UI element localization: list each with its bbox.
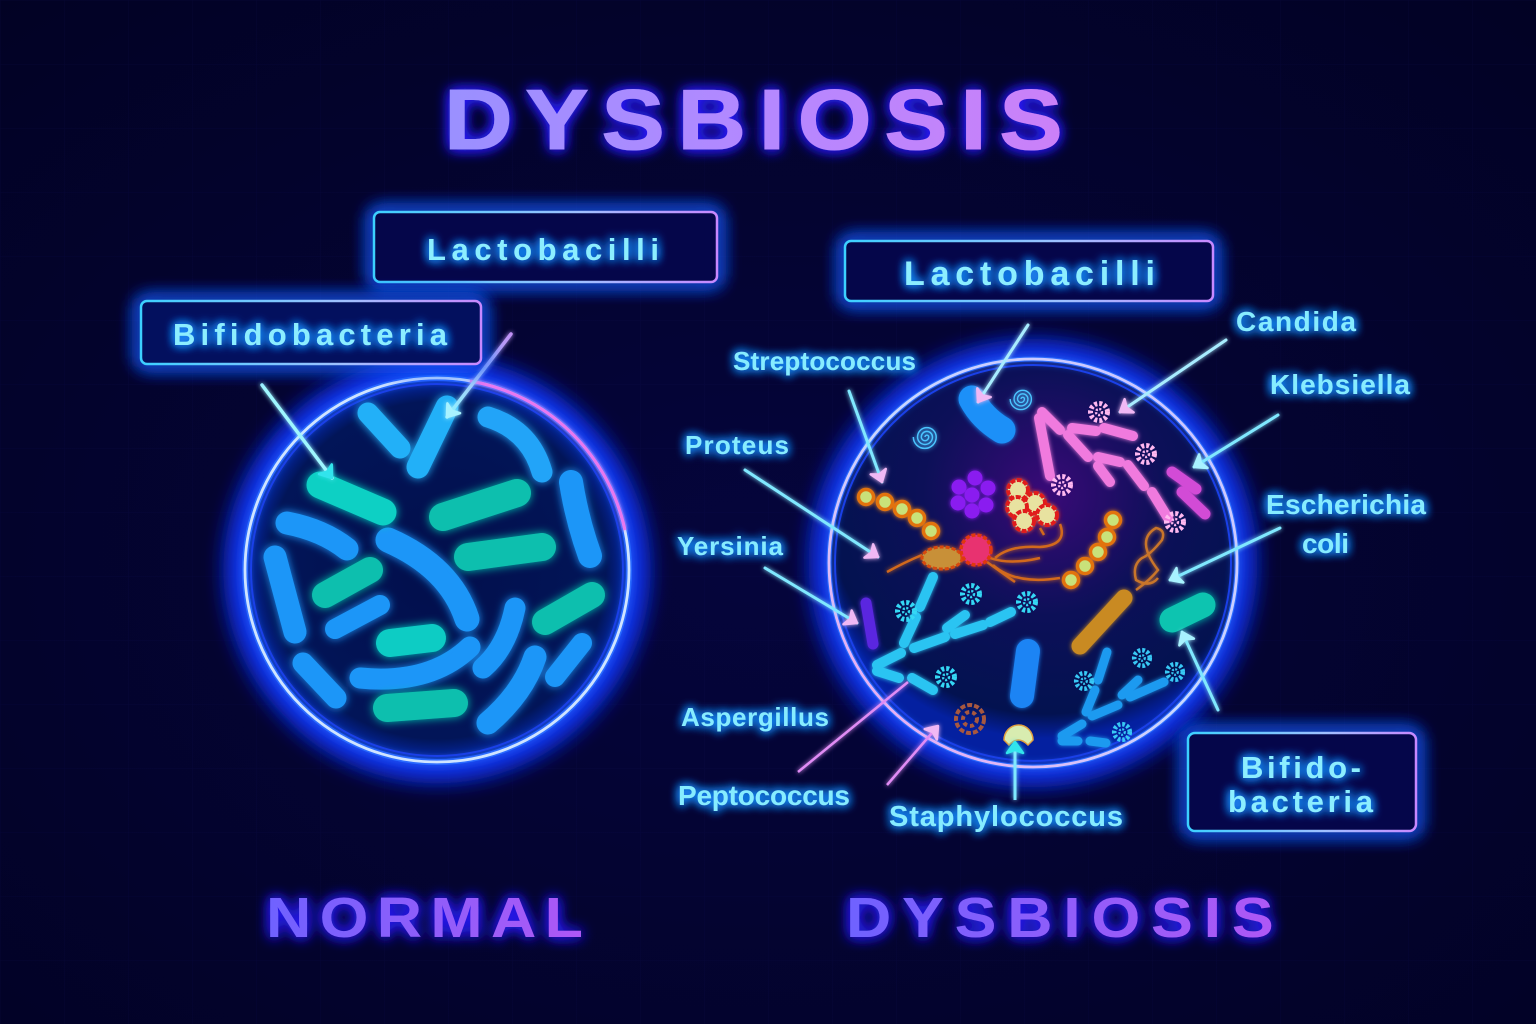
species labels: Aspergillus	[681, 702, 829, 732]
heading: dysbiosis: DYSBIOSIS	[846, 886, 1284, 949]
species labels: Staphylococcus	[889, 801, 1123, 833]
species labels: Yersinia	[677, 531, 784, 561]
label: lactobacilli normal: Lactobacilli	[427, 232, 659, 267]
species labels: Peptococcus	[678, 780, 850, 811]
arrow: yersinia	[765, 568, 857, 623]
pink fungal flowers	[1054, 404, 1184, 530]
gold rod	[1080, 598, 1124, 646]
blue chain, lower right	[1062, 652, 1164, 743]
label: lactobacilli dysbiosis: Lactobacilli	[904, 255, 1155, 293]
peptococcus brown cluster	[956, 705, 984, 733]
arrow: peptococcus	[887, 726, 938, 785]
arrow: proteus	[745, 470, 878, 557]
species labels: Streptococcus	[733, 346, 916, 376]
klebsiella rods	[1172, 472, 1205, 514]
red and cream cluster	[1007, 480, 1057, 535]
species labels: Proteus	[685, 430, 789, 460]
streptococcus chains	[858, 490, 1120, 588]
label: bifidobacteria normal: Bifidobacteria	[173, 317, 448, 352]
arrow: lactobacilli	[978, 325, 1028, 402]
title: DYSBIOSIS	[444, 73, 1075, 168]
species labels: coli	[1302, 528, 1349, 559]
species labels: Klebsiella	[1270, 369, 1410, 400]
arrow: bifidobacteria	[1182, 632, 1218, 710]
label: bifidobacteria dysbiosis	[1188, 733, 1416, 831]
heading: normal: NORMAL	[266, 886, 591, 949]
cyan fungal flowers	[898, 586, 1036, 686]
panel: normal microbiota	[141, 212, 717, 949]
arrow: lactobacilli to blue rod	[447, 334, 511, 417]
cyan chain: aspergillus	[877, 577, 1011, 690]
arrow: candida	[1120, 340, 1226, 412]
spirals	[913, 390, 1031, 448]
teal rod	[1172, 605, 1203, 620]
dysbiosis circle	[827, 357, 1239, 769]
blue fungal flowers	[1076, 650, 1183, 740]
arrow: escherichia	[1170, 528, 1280, 580]
purple coccus cluster	[950, 470, 996, 518]
species labels: Escherichia	[1266, 489, 1426, 520]
staphylococcus cap	[1004, 725, 1033, 745]
arrow: bifidobacteria to teal rod	[262, 385, 332, 478]
arrow: staphylococcus	[1014, 742, 1016, 800]
normal circle	[243, 376, 631, 764]
label: bifidobacteria normal	[141, 301, 481, 364]
pink chain: candida	[1039, 412, 1168, 518]
label: lactobacilli normal	[374, 212, 717, 282]
arrow: streptococcus	[849, 391, 882, 482]
blue bacteria, normal	[275, 407, 590, 723]
panel: dysbiosis microbiota	[677, 241, 1426, 949]
label: bifidobacteria dysbiosis: Bifido-	[1241, 750, 1361, 785]
label: bifidobacteria dysbiosis: bacteria	[1228, 784, 1374, 819]
teal bacteria, normal	[320, 485, 592, 708]
proteus	[887, 524, 1062, 582]
escherichia curly flagella	[1135, 528, 1163, 590]
blue rods	[972, 399, 1028, 696]
species labels: Candida	[1236, 306, 1356, 337]
arrow: aspergillus line	[798, 682, 908, 772]
yersinia rod	[866, 603, 873, 644]
species labels	[677, 306, 1426, 833]
label: lactobacilli dysbiosis	[845, 241, 1213, 301]
arrow: klebsiella	[1194, 415, 1278, 467]
